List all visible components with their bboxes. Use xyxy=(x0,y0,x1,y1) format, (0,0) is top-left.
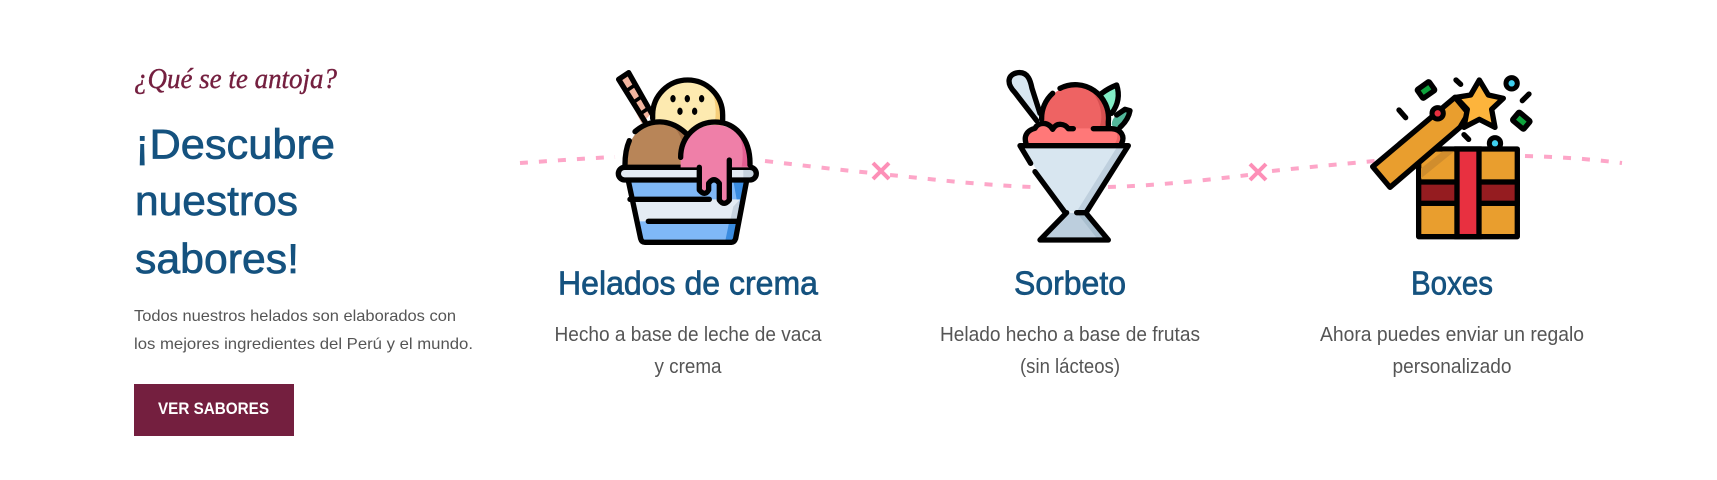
heading xyxy=(135,120,335,282)
panel: helados de crema xyxy=(554,73,822,378)
button: ver sabores: VER SABORES xyxy=(158,400,269,418)
description: Hecho a base de leche de vaca xyxy=(554,324,822,346)
heading: ¡Descubre xyxy=(135,120,335,168)
heading: sorbeto: Sorbeto xyxy=(1014,264,1126,302)
dashed pink route xyxy=(520,156,1622,187)
description: personalizado xyxy=(1392,356,1512,378)
heading: nuestros xyxy=(135,177,298,224)
tagline: ¿Qué se te antoja? xyxy=(134,63,337,95)
panel: sorbeto xyxy=(940,73,1200,378)
description: y crema xyxy=(654,356,722,378)
intro paragraph: Todos nuestros helados son elaborados con xyxy=(134,308,456,325)
intro paragraph: los mejores ingredientes del Perú y el mundo. xyxy=(134,336,473,353)
description: (sin lácteos) xyxy=(1020,356,1120,378)
description xyxy=(1320,324,1584,378)
description: Ahora puedes enviar un regalo xyxy=(1320,324,1584,346)
description: Helado hecho a base de frutas xyxy=(940,324,1200,346)
heading: sabores! xyxy=(135,235,299,282)
panel: boxes xyxy=(1320,78,1584,378)
description xyxy=(554,324,822,378)
panel: intro xyxy=(134,63,473,436)
intro paragraph xyxy=(134,308,473,353)
icon: sorbet glass xyxy=(1009,73,1130,240)
icon: ice cream cup xyxy=(618,73,756,242)
heading: boxes: Boxes xyxy=(1411,264,1493,302)
icon: gift box xyxy=(1373,78,1530,237)
heading: helados de crema: Helados de crema xyxy=(558,264,819,302)
button: ver sabores xyxy=(134,384,294,436)
description xyxy=(940,324,1200,378)
